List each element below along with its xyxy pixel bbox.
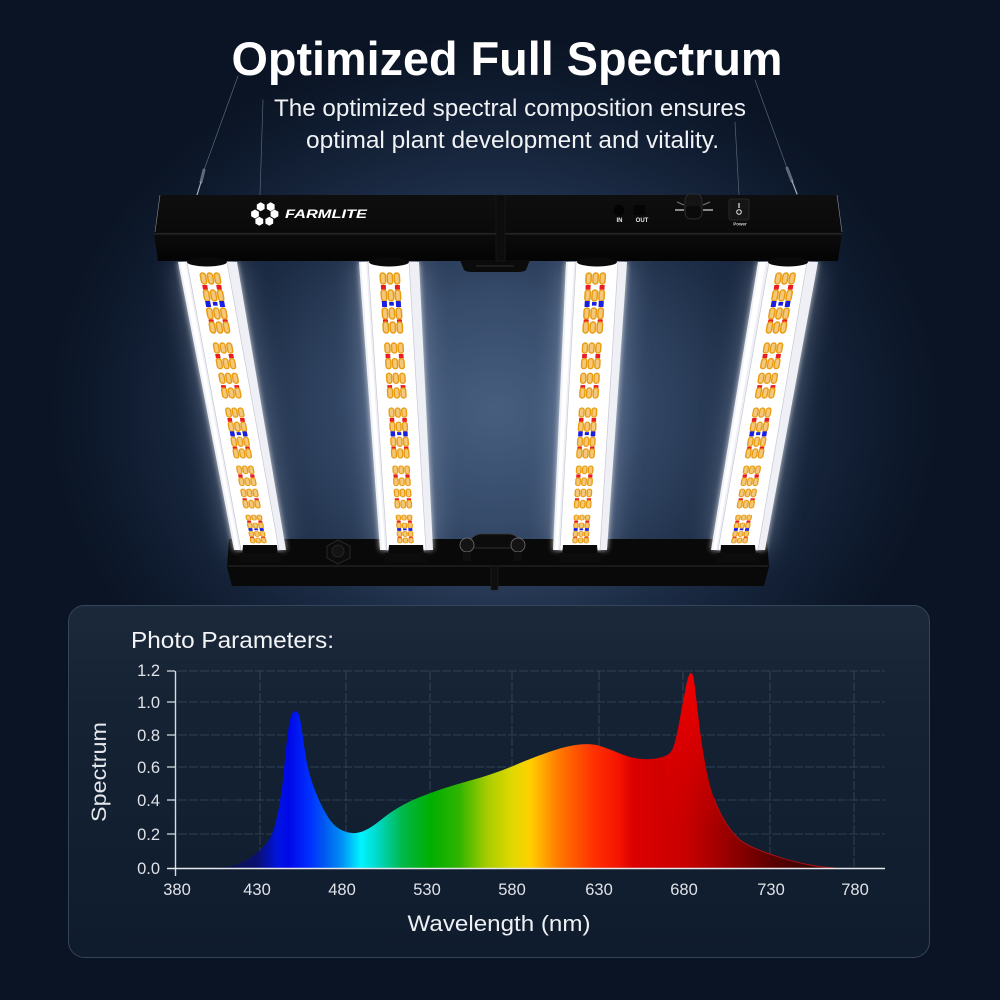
title: Optimized Full Spectrum	[232, 32, 782, 85]
x axis tick labels: 730	[757, 881, 785, 899]
light bar 3	[553, 262, 627, 550]
x axis tick labels	[163, 881, 869, 899]
x axis tick labels: 380	[163, 881, 191, 899]
top housing bar	[154, 194, 842, 272]
light glow	[178, 262, 818, 550]
y axis title: Spectrum	[87, 722, 111, 822]
y axis tick labels: 0.8	[137, 727, 160, 745]
x axis tick labels: 530	[413, 881, 441, 899]
subtitle: optimal plant development and vitality.	[306, 127, 719, 154]
y axis tick labels: 0.2	[137, 826, 160, 844]
y axis tick labels: 0.0	[137, 860, 160, 878]
power switch	[729, 199, 749, 226]
light bar 4	[711, 262, 818, 550]
light bar 1	[178, 262, 286, 550]
x axis tick labels: 780	[841, 881, 869, 899]
IN and OUT ports: OUT	[636, 218, 649, 224]
subtitle	[274, 95, 746, 154]
x axis tick labels: 580	[498, 881, 526, 899]
spectrum area	[205, 670, 835, 869]
logo: FARMLITE	[285, 209, 367, 221]
x axis tick labels: 430	[243, 881, 271, 899]
centre handle	[460, 534, 525, 590]
grid lines	[178, 671, 885, 868]
x axis tick labels: 480	[328, 881, 356, 899]
y axis tick labels: 0.6	[137, 759, 160, 777]
subtitle: The optimized spectral composition ensures	[274, 95, 746, 122]
logo	[251, 202, 367, 226]
centre hinge	[460, 195, 530, 272]
dimmer knob	[675, 194, 713, 219]
clamps under top bar	[187, 258, 808, 266]
x axis title: Wavelength (nm)	[408, 911, 590, 936]
light bar 2	[359, 262, 433, 550]
y axis tick labels: 0.4	[137, 792, 160, 810]
power switch: Power	[733, 222, 747, 226]
IN and OUT ports	[614, 204, 649, 224]
spectrum chart	[87, 662, 885, 936]
panel heading: Photo Parameters:	[131, 627, 334, 653]
bottom housing bar	[227, 534, 769, 590]
y axis tick labels	[137, 662, 160, 878]
y axis tick labels: 1.2	[137, 662, 160, 680]
x axis tick labels: 630	[585, 881, 613, 899]
IN and OUT ports: IN	[616, 218, 622, 224]
y axis tick labels: 1.0	[137, 694, 160, 712]
bottom bar end clamps	[239, 545, 759, 563]
panel: photo parameters	[68, 606, 930, 958]
hex connector	[327, 540, 350, 564]
hanging wires	[197, 76, 797, 195]
x axis tick labels: 680	[670, 881, 698, 899]
axes	[167, 671, 885, 876]
